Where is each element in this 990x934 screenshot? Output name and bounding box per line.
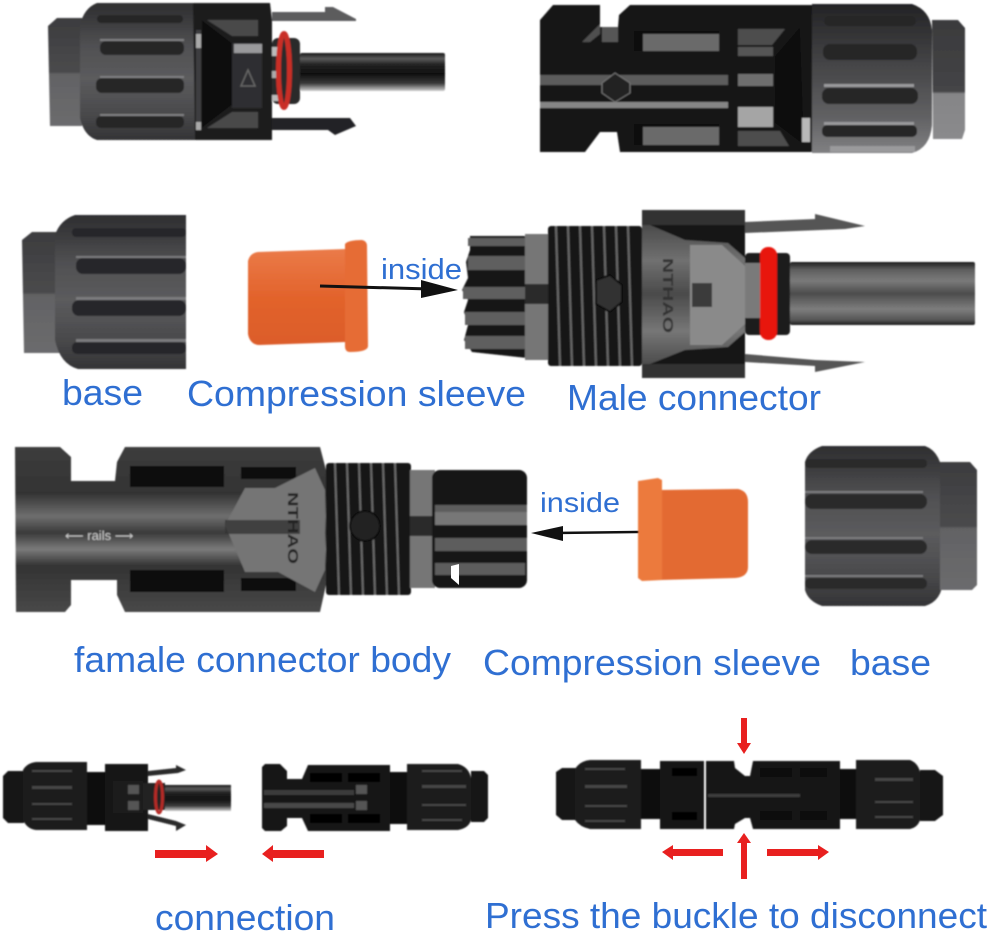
photo: assembled female connector (540, 4, 965, 153)
small photo: unplugged male connector (3, 762, 231, 831)
slotted fingers (462, 236, 527, 358)
arrow: sleeve goes inside (320, 280, 458, 298)
photo: assembled male connector (48, 3, 445, 140)
label: compression sleeve (female): Compression sleeve (483, 642, 821, 683)
latch arms (272, 7, 356, 21)
photo: female connector body (15, 447, 527, 612)
label: famale connector body: famale connector body (74, 639, 451, 680)
central rails (540, 75, 728, 85)
compression sleeve, female side (638, 478, 748, 581)
label: inside (female): inside (540, 487, 620, 518)
seal ring and pin (745, 253, 790, 335)
latch arms (745, 214, 865, 233)
threaded section (326, 463, 411, 595)
hex end cap (932, 20, 965, 139)
small photo: mated connectors (556, 760, 943, 829)
arrow: pull left (662, 845, 723, 860)
seal ring and pin (272, 38, 300, 104)
arrow: sleeve goes inside (female) (531, 526, 640, 541)
photo: male connector body (462, 210, 975, 378)
label: compression sleeve (male): Compression sleeve (187, 373, 526, 414)
housing (15, 447, 326, 612)
latch housing (540, 5, 812, 152)
certification mark (602, 73, 630, 102)
arrow: press down (737, 718, 751, 754)
photo: female connector body: NTHAO (284, 492, 301, 564)
photo: male connector body: NTHAO (659, 258, 676, 333)
hex end cap (48, 18, 82, 126)
label: base (male): base (62, 372, 143, 413)
photo: female connector body: ⟵ rails ⟶ (65, 528, 133, 543)
compression sleeve, male side (248, 240, 368, 352)
arrow: push left (262, 845, 324, 862)
white notch (451, 564, 459, 585)
latch body (642, 210, 745, 378)
arrow: push right (155, 845, 218, 862)
ribbed nut (812, 4, 932, 153)
threaded section (548, 226, 642, 366)
label: base (female): base (850, 642, 931, 683)
small photo: unplugged female connector (262, 764, 488, 831)
collar and fingers (410, 470, 435, 588)
label: male connector: Male connector (567, 377, 821, 418)
base nut, male side (22, 215, 186, 369)
ribbed nut (80, 3, 196, 140)
collar and latch body (193, 3, 272, 140)
base nut, female side (805, 446, 977, 606)
arrow: pull right (767, 845, 829, 860)
arrow: press up (737, 833, 751, 879)
label: inside (male): inside (381, 254, 462, 286)
